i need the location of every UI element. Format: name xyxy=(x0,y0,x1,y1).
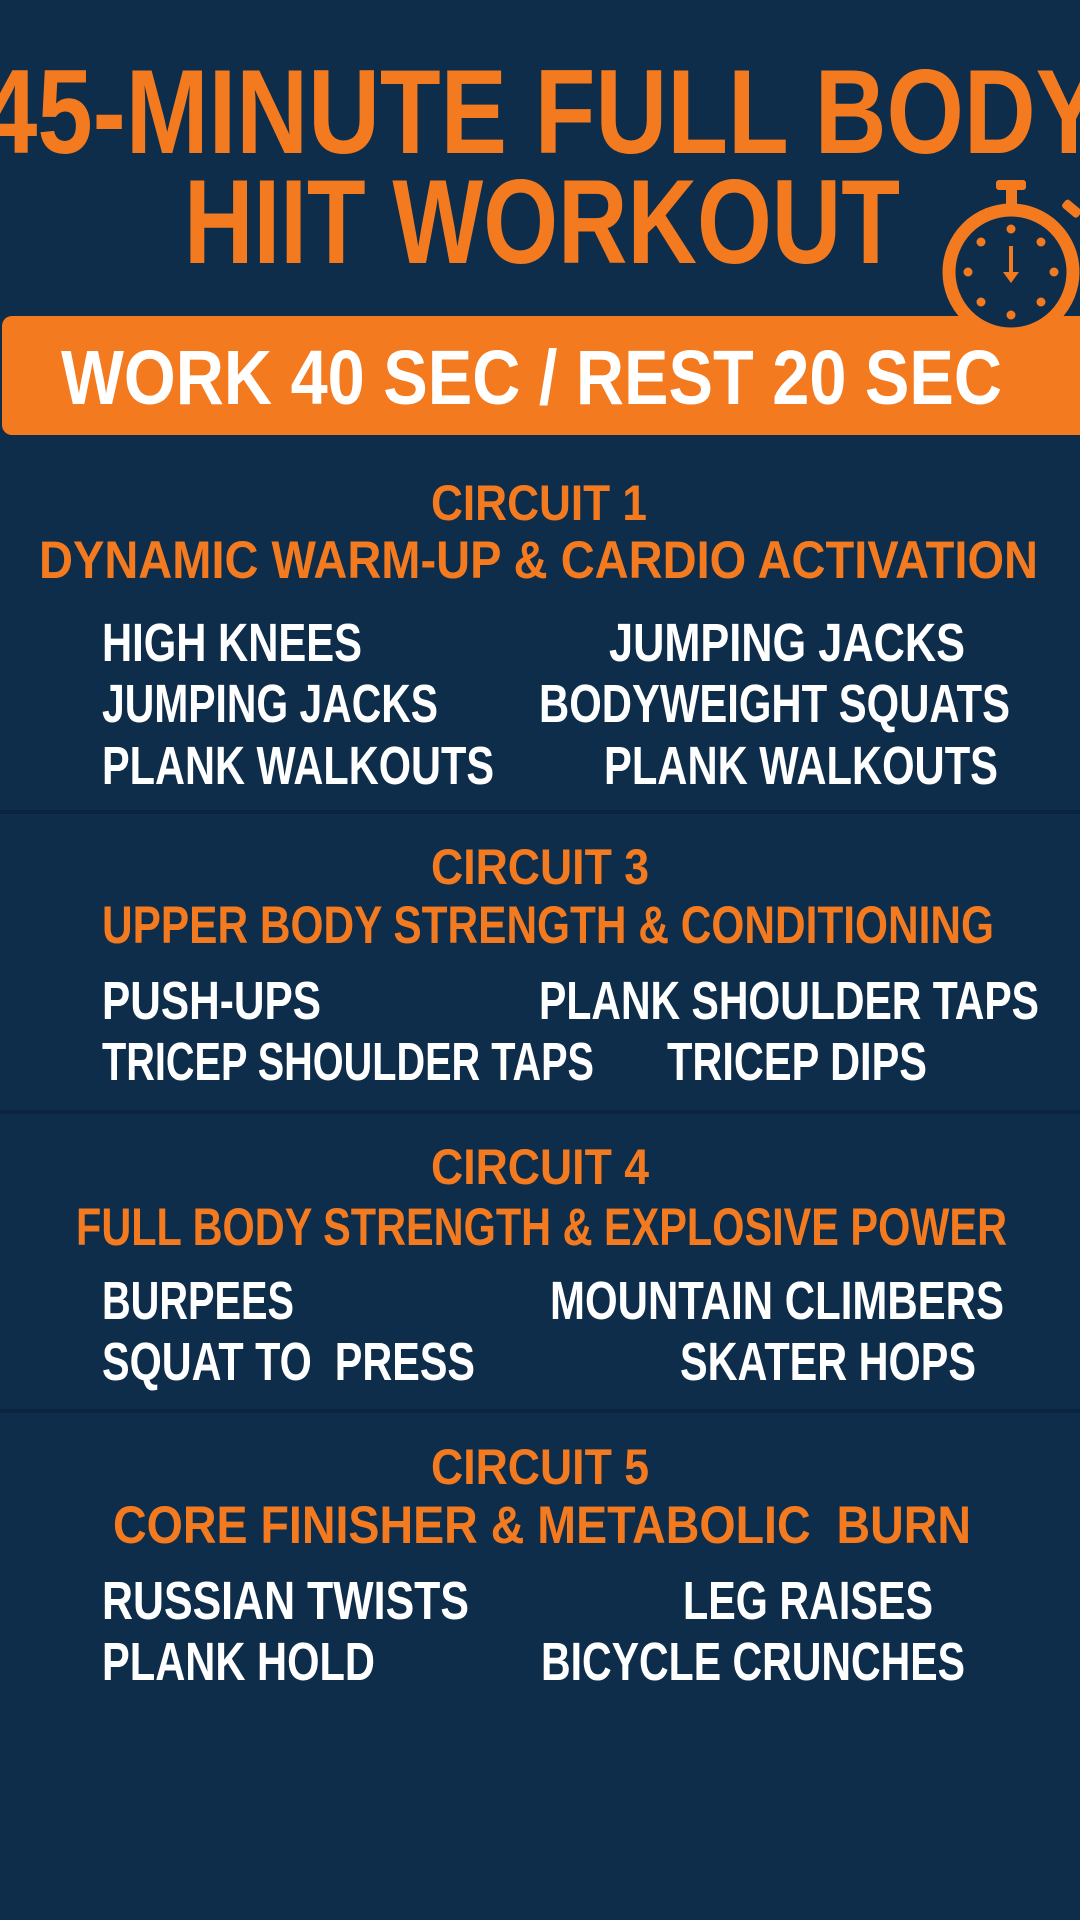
title xyxy=(0,45,1080,289)
icon: stopwatch xyxy=(949,180,1080,334)
panel: circuit 1: JUMPING JACKS xyxy=(609,613,965,673)
panel: circuit 4: CIRCUIT 4 xyxy=(431,1139,649,1195)
title: HIIT WORKOUT xyxy=(184,155,900,289)
panel: circuit 5: CIRCUIT 5 xyxy=(431,1439,649,1495)
panel: circuit 1: CIRCUIT 1 xyxy=(431,475,647,531)
panel: circuit 1 xyxy=(39,475,1038,796)
panel: circuit 4 xyxy=(76,1139,1007,1392)
panel: circuit 3: TRICEP DIPS xyxy=(667,1032,927,1092)
panel: circuit 3: CIRCUIT 3 xyxy=(431,839,649,895)
panel: circuit 1: PLANK WALKOUTS xyxy=(102,736,494,796)
panel: circuit 1: HIGH KNEES xyxy=(102,613,362,673)
panel: circuit 5: LEG RAISES xyxy=(683,1571,933,1631)
panel: circuit 4: SQUAT TO PRESS xyxy=(102,1332,475,1392)
banner: work/rest xyxy=(2,316,1080,435)
panel: circuit 4: BURPEES xyxy=(102,1271,294,1331)
panel: circuit 3: PUSH-UPS xyxy=(102,971,321,1031)
panel: circuit 5 xyxy=(102,1439,971,1692)
panel: circuit 3: TRICEP SHOULDER TAPS xyxy=(102,1032,594,1092)
panel: circuit 1: JUMPING JACKS xyxy=(102,674,438,734)
panel: circuit 5: CORE FINISHER & METABOLIC BURN xyxy=(113,1496,971,1555)
panel: circuit 5: PLANK HOLD xyxy=(102,1632,375,1692)
panel: circuit 5: RUSSIAN TWISTS xyxy=(102,1571,469,1631)
panel: circuit 3 xyxy=(102,839,1039,1092)
panel: circuit 4: SKATER HOPS xyxy=(680,1332,976,1392)
